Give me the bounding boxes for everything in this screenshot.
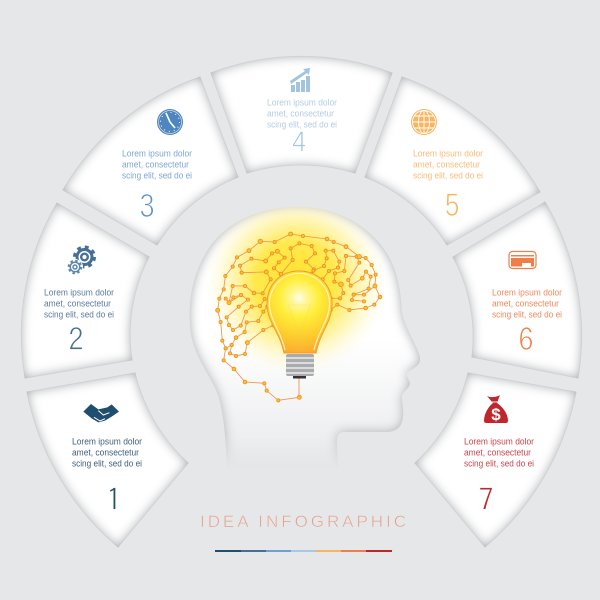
icon: handshake	[83, 404, 119, 422]
panel 2	[21, 203, 149, 378]
icon: credit card	[509, 252, 536, 268]
panel 7 text: Lorem ipsum dolor	[464, 436, 535, 448]
panel 6 number: 6	[518, 324, 534, 355]
panel 2 text: scing elit, sed do ei	[44, 310, 114, 320]
panel 1 number: 1	[106, 484, 122, 515]
panel 2 text: Lorem ipsum dolor	[44, 288, 115, 298]
panel 2 number: 2	[68, 324, 84, 355]
panel 5 shape	[365, 77, 540, 245]
panel 7 text: amet, consectetur	[464, 448, 532, 458]
brain circuit network	[216, 232, 382, 400]
panel 4 number: 4	[292, 129, 306, 157]
panel 5 text	[413, 148, 484, 182]
panel 4 text: Lorem ipsum dolor	[267, 98, 338, 108]
panel 6	[453, 202, 582, 378]
panel 5 text: amet, consectetur	[413, 160, 481, 170]
light bulb	[267, 271, 332, 397]
panel 7 shape	[415, 373, 576, 547]
panel 4 text: scing elit, sed do ei	[267, 120, 337, 130]
panel 4	[211, 56, 392, 173]
panel 2 text: amet, consectetur	[44, 298, 112, 310]
panel 7 text: scing elit, sed do ei	[464, 458, 534, 470]
panel 6 text	[492, 288, 563, 320]
icon: money bag: $	[491, 405, 501, 424]
colour bar	[215, 550, 392, 552]
panel 5	[365, 77, 540, 245]
panel 6 text: amet, consectetur	[492, 298, 560, 310]
panel 4 text: amet, consectetur	[267, 108, 335, 120]
panel 5 text: scing elit, sed do ei	[413, 170, 483, 182]
bulb glass	[267, 271, 332, 353]
panel 3 number: 3	[139, 191, 155, 222]
icon: bar chart	[290, 68, 310, 92]
panel 3 shape	[63, 77, 238, 245]
connector wire	[298, 376, 300, 397]
panel 3 text: Lorem ipsum dolor	[122, 148, 193, 160]
icon: gears	[67, 247, 94, 275]
filament	[288, 305, 311, 352]
panel 7	[415, 373, 576, 547]
panel 6 text: scing elit, sed do ei	[492, 310, 562, 320]
panel 7 number: 7	[478, 484, 494, 515]
panel 4 shape	[211, 56, 392, 173]
panel 3 text: scing elit, sed do ei	[122, 170, 192, 182]
title: IDEA INFOGRAPHIC	[200, 512, 406, 531]
panel 3	[63, 77, 238, 245]
panel 3 text: amet, consectetur	[122, 160, 190, 170]
panel 2 shape	[21, 203, 149, 378]
screw base	[286, 354, 314, 376]
panel 3 text	[122, 148, 193, 182]
panel 1 text: Lorem ipsum dolor	[72, 436, 143, 448]
panel 1 text	[72, 436, 143, 470]
head silhouette	[190, 207, 420, 472]
panel 1 text: amet, consectetur	[72, 448, 140, 458]
panel 1 shape	[27, 373, 188, 547]
panel 6 text: Lorem ipsum dolor	[492, 288, 563, 298]
panel 7 text	[464, 436, 535, 470]
panel 1	[27, 373, 188, 547]
icon: globe	[411, 109, 437, 135]
icon: money bag	[484, 395, 508, 424]
glow behind bulb	[210, 207, 382, 368]
panel 6 shape	[453, 202, 582, 378]
panel 5 number: 5	[444, 190, 460, 221]
panel 2 text	[44, 288, 115, 320]
panel 4 text	[267, 98, 338, 130]
panel 1 text: scing elit, sed do ei	[72, 458, 142, 470]
panel 5 text: Lorem ipsum dolor	[413, 148, 484, 160]
icon: clock	[157, 109, 183, 135]
